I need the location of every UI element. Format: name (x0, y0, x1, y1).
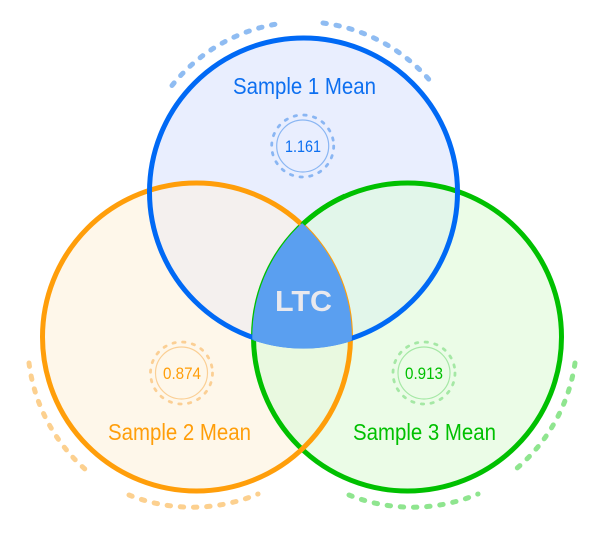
sample 1 value badge: 1.161 (285, 137, 321, 156)
sample 1 value badge (272, 115, 334, 177)
orange circle outline (42, 183, 350, 491)
panel: sample 1 (172, 23, 434, 177)
sample 3 value badge (393, 342, 455, 404)
blue circle outline (150, 38, 458, 346)
green top arc segment over orange (302, 196, 345, 225)
sample 2 value badge (150, 342, 212, 404)
LTC label: LTC (275, 286, 332, 318)
sample 3 heading: Sample 3 Mean (353, 419, 496, 445)
sample 2 value badge: 0.874 (163, 364, 201, 383)
sample 2 dashed arcs (29, 363, 258, 507)
sample 3 dashed arcs (349, 363, 575, 507)
panel: sample 2 (29, 342, 258, 507)
sample 3 value badge: 0.913 (405, 364, 443, 383)
sample 2 heading: Sample 2 Mean (108, 419, 251, 445)
sample 1 dashed arcs (172, 23, 434, 86)
panel: sample 3 (349, 342, 575, 507)
LTC region underlay covering inner strokes (254, 340, 350, 349)
circle fills (42, 38, 562, 491)
green circle outline (254, 183, 562, 491)
sample 1 heading: Sample 1 Mean (233, 73, 376, 99)
